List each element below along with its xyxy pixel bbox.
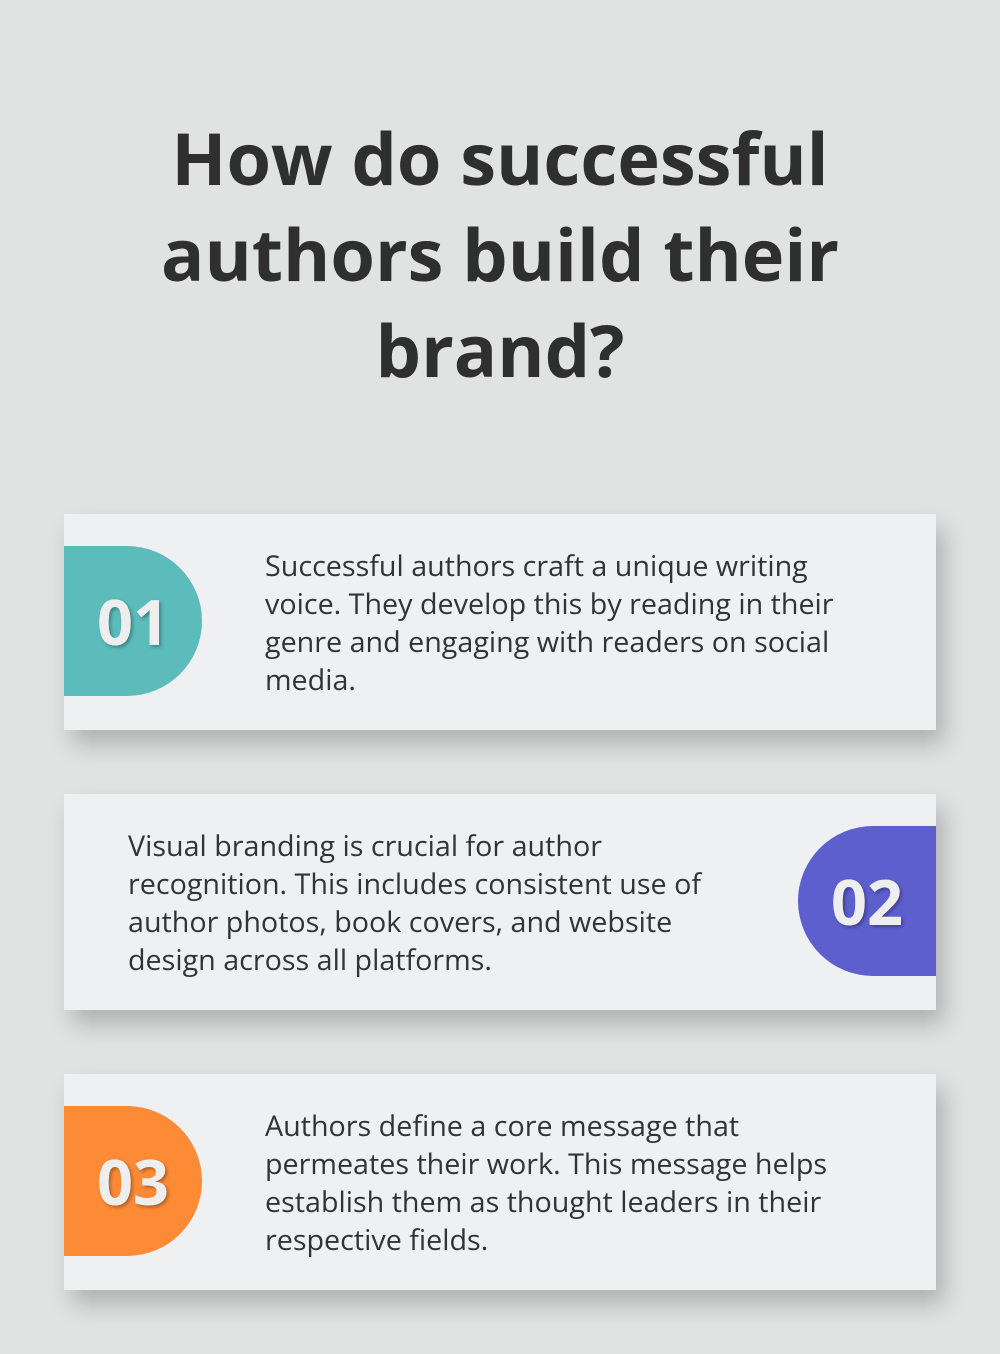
badge 02	[798, 826, 936, 976]
badge 01: 01	[97, 578, 169, 664]
badge 01	[64, 546, 202, 696]
badge 02: 02	[831, 858, 903, 944]
title: brand?	[376, 301, 624, 399]
text 02: Visual branding is crucial for author recognition. This includes consistent use of author photos, book covers, and website design across all platforms.	[128, 826, 701, 979]
panel: step 02	[64, 794, 936, 1010]
panel: step 01	[64, 514, 936, 730]
title: authors build their	[161, 205, 839, 303]
badge 03: 03	[97, 1138, 169, 1224]
title: How do successful	[171, 109, 829, 207]
text 01: Successful authors craft a unique writing voice. They develop this by reading in their genre and engaging with readers on social media.	[265, 546, 834, 699]
text 03: Authors define a core message that permeates their work. This message helps establish them as thought leaders in their respective fields.	[265, 1106, 827, 1259]
panel: step 03	[64, 1074, 936, 1290]
badge 03	[64, 1106, 202, 1256]
title	[161, 109, 839, 399]
